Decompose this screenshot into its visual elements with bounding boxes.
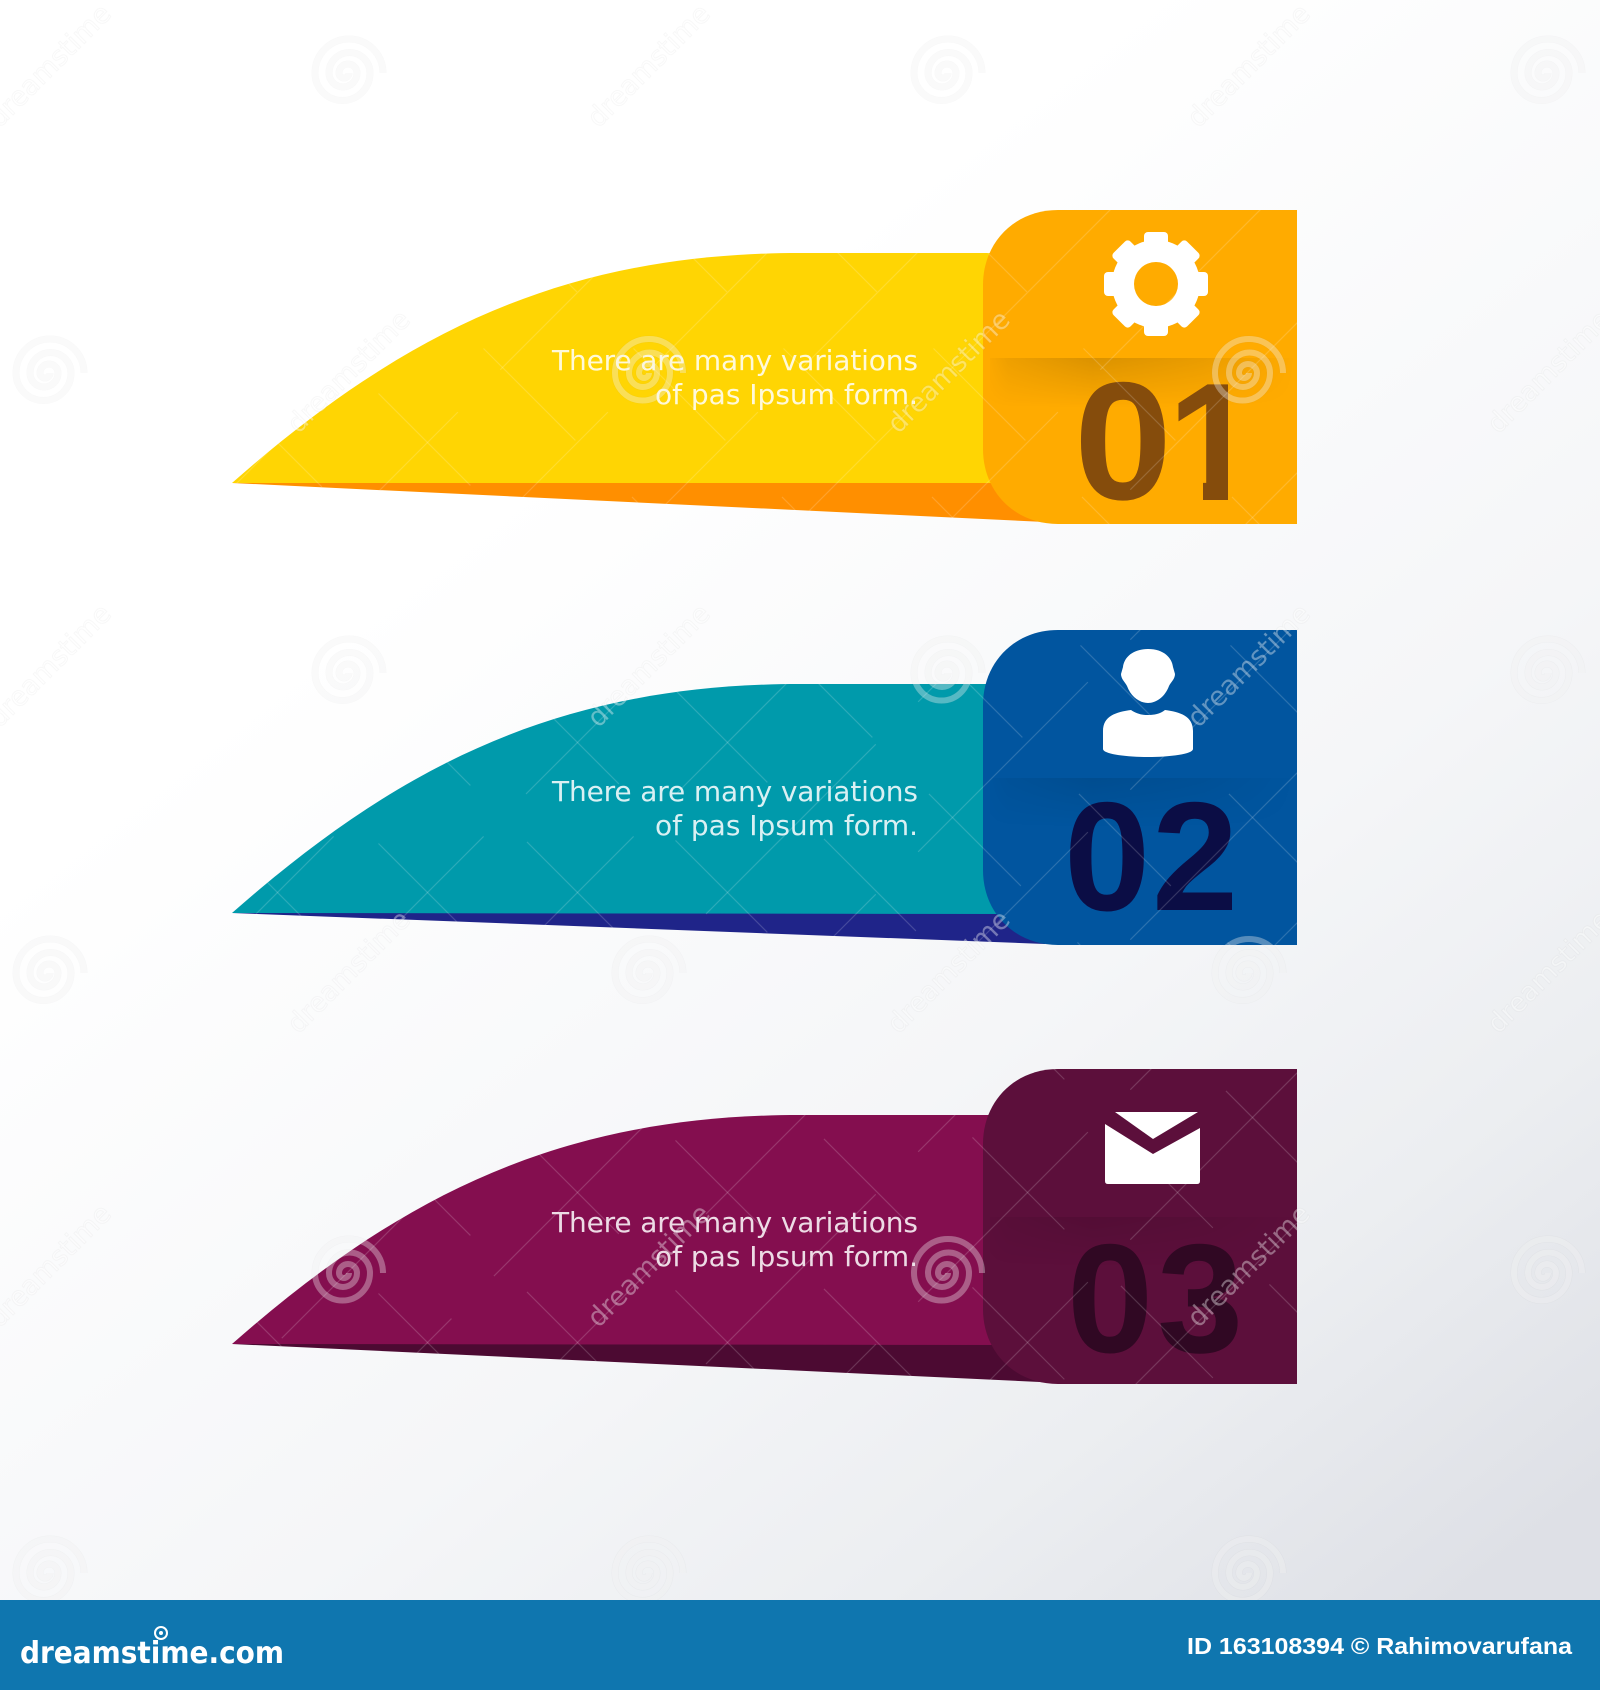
number 01 <box>1081 382 1228 501</box>
image id and credit: ID 163108394 © Rahimovarufana <box>1187 1633 1572 1659</box>
tab shadow band <box>996 358 1258 396</box>
number 01: 0 <box>1074 347 1172 535</box>
yellow blade fold <box>232 470 1045 522</box>
step 02 caption <box>551 775 918 842</box>
icon: envelope <box>1105 1112 1200 1184</box>
watermark text: dreamstime <box>581 0 717 134</box>
dark blade fold <box>232 1330 1040 1382</box>
number 03: 3 <box>1157 1212 1243 1385</box>
icon: gear <box>1104 232 1208 336</box>
number 01: 1 <box>1167 348 1260 536</box>
watermark text <box>0 0 1600 1334</box>
tab shadow band <box>1020 778 1211 801</box>
step 01 caption: of pas Ipsum form. <box>655 378 918 411</box>
panel: step 03 magenta <box>232 1069 1297 1385</box>
orange number tab <box>983 210 1297 524</box>
blue number tab <box>983 630 1297 945</box>
plum number tab <box>983 1069 1297 1384</box>
panel: step 02 teal <box>232 630 1297 945</box>
number 02: 2 <box>1152 770 1238 943</box>
watermark text: dreamstime <box>281 304 417 440</box>
watermark text: dreamstime <box>881 904 1017 1040</box>
step 02 caption: of pas Ipsum form. <box>655 809 918 842</box>
watermark text: dreamstime <box>1181 1198 1317 1334</box>
watermark text: dreamstime <box>1181 598 1317 734</box>
watermark text: dreamstime <box>581 598 717 734</box>
step 01 caption: There are many variations <box>551 344 918 377</box>
step 03 caption <box>551 1206 918 1273</box>
footer bar <box>0 1600 1600 1690</box>
icon: person <box>1103 649 1193 757</box>
number 02: 0 <box>1064 770 1150 943</box>
number 03: 0 <box>1067 1212 1153 1385</box>
panel: step 01 yellow <box>232 210 1297 536</box>
watermark text: dreamstime <box>881 304 1017 440</box>
navy blade fold <box>232 900 1045 944</box>
step 02 caption: There are many variations <box>551 775 918 808</box>
step 01 caption <box>551 344 918 411</box>
watermark text: dreamstime <box>281 904 417 1040</box>
teal blade <box>232 684 1040 914</box>
tab shadow band <box>1087 1217 1103 1219</box>
watermark line grid <box>230 200 1300 1400</box>
yellow blade <box>232 253 1040 483</box>
watermark text: dreamstime <box>581 1198 717 1334</box>
step 03 caption: of pas Ipsum form. <box>655 1240 918 1273</box>
step 03 caption: There are many variations <box>551 1206 918 1239</box>
watermark text: dreamstime <box>1181 0 1317 134</box>
footer logo: dreamstime.com <box>20 1636 284 1671</box>
magenta blade <box>232 1115 1040 1345</box>
